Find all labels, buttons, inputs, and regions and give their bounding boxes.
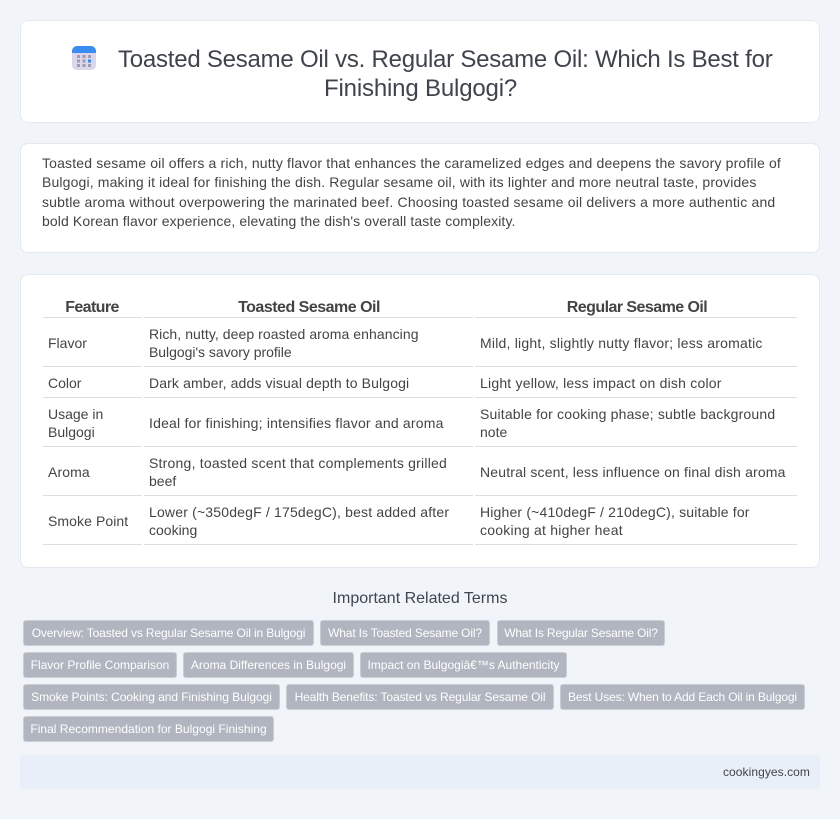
tag: aroma: Aroma Differences in Bulgogi <box>191 658 346 672</box>
tag: toasted <box>320 620 490 646</box>
tag: aroma <box>183 652 354 678</box>
comparison table: Smoke Point <box>48 513 128 529</box>
comparison table: Lower (~350degF / 175degC), best added after <box>149 504 449 520</box>
tag: smoke points: Smoke Points: Cooking and Finishing Bulgogi <box>31 690 272 704</box>
intro paragraph card <box>20 143 820 253</box>
footer bar <box>20 755 820 789</box>
tag: authenticity <box>360 652 567 678</box>
tag: regular <box>497 620 665 646</box>
tag: regular: What Is Regular Sesame Oil? <box>504 626 658 640</box>
comparison table: Light yellow, less impact on dish color <box>480 375 722 391</box>
tag: smoke points <box>23 684 280 710</box>
tag: best uses: Best Uses: When to Add Each Oil in Bulgogi <box>568 690 797 704</box>
comparison table: Suitable for cooking phase; subtle background <box>480 406 775 422</box>
related terms tags <box>23 620 805 742</box>
comparison table: Usage in <box>48 406 103 422</box>
tag: final <box>23 716 274 742</box>
tag: flavor <box>23 652 177 678</box>
tag: overview <box>23 620 314 646</box>
intro paragraph: subtle aroma without overpowering the marinated beef. Choosing toasted sesame oil delivers a more authentic and <box>42 194 775 210</box>
comparison table: Feature <box>65 299 119 316</box>
comparison table: Aroma <box>48 464 90 480</box>
comparison table: Bulgogi <box>48 424 95 440</box>
comparison table: Mild, light, slightly nutty flavor; less aromatic <box>480 335 763 351</box>
comparison table: Ideal for finishing; intensifies flavor and aroma <box>149 415 444 431</box>
tag: toasted: What Is Toasted Sesame Oil? <box>328 626 482 640</box>
comparison table: Color <box>48 375 81 391</box>
header card <box>20 20 820 123</box>
icon: calendar <box>72 46 96 70</box>
intro paragraph: bold Korean flavor experience, elevating the dish's overall taste complexity. <box>42 213 516 229</box>
comparison table: Strong, toasted scent that complements grilled <box>149 455 447 471</box>
tag: authenticity: Impact on Bulgogiâ€™s Authenticity <box>367 658 560 672</box>
comparison table: cooking <box>149 522 197 538</box>
comparison table: Dark amber, adds visual depth to Bulgogi <box>149 375 409 391</box>
tag: overview: Overview: Toasted vs Regular Sesame Oil in Bulgogi <box>32 626 305 640</box>
tag: health: Health Benefits: Toasted vs Regular Sesame Oil <box>295 690 545 704</box>
tag: final: Final Recommendation for Bulgogi Finishing <box>30 722 267 736</box>
comparison table: Flavor <box>48 335 87 351</box>
related terms heading: Important Related Terms <box>333 590 507 607</box>
comparison table: Bulgogi's savory profile <box>149 344 292 360</box>
comparison table: cooking at higher heat <box>480 522 623 538</box>
comparison table card <box>20 274 820 568</box>
comparison table: Neutral scent, less influence on final dish aroma <box>480 464 786 480</box>
tag: health <box>286 684 554 710</box>
intro paragraph: Toasted sesame oil offers a rich, nutty flavor that enhances the caramelized edges and deepens the savory profile of <box>42 155 781 171</box>
comparison table: Higher (~410degF / 210degC), suitable for <box>480 504 750 520</box>
tag: flavor: Flavor Profile Comparison <box>31 658 169 672</box>
title <box>118 46 772 102</box>
comparison table: beef <box>149 473 176 489</box>
intro paragraph <box>42 155 781 229</box>
comparison table: Rich, nutty, deep roasted aroma enhancing <box>149 326 419 342</box>
footer text: cookingyes.com <box>723 765 810 779</box>
title: Toasted Sesame Oil vs. Regular Sesame Oil: Which Is Best for <box>118 46 772 73</box>
comparison table: note <box>480 424 507 440</box>
title: Finishing Bulgogi? <box>324 75 517 102</box>
comparison table: Regular Sesame Oil <box>567 299 707 316</box>
tag: best uses <box>560 684 805 710</box>
comparison table: Toasted Sesame Oil <box>238 299 380 316</box>
intro paragraph: Bulgogi, making it ideal for finishing the dish. Regular sesame oil, with its lighter and more neutral taste, provides <box>42 174 756 190</box>
comparison table <box>43 299 797 545</box>
